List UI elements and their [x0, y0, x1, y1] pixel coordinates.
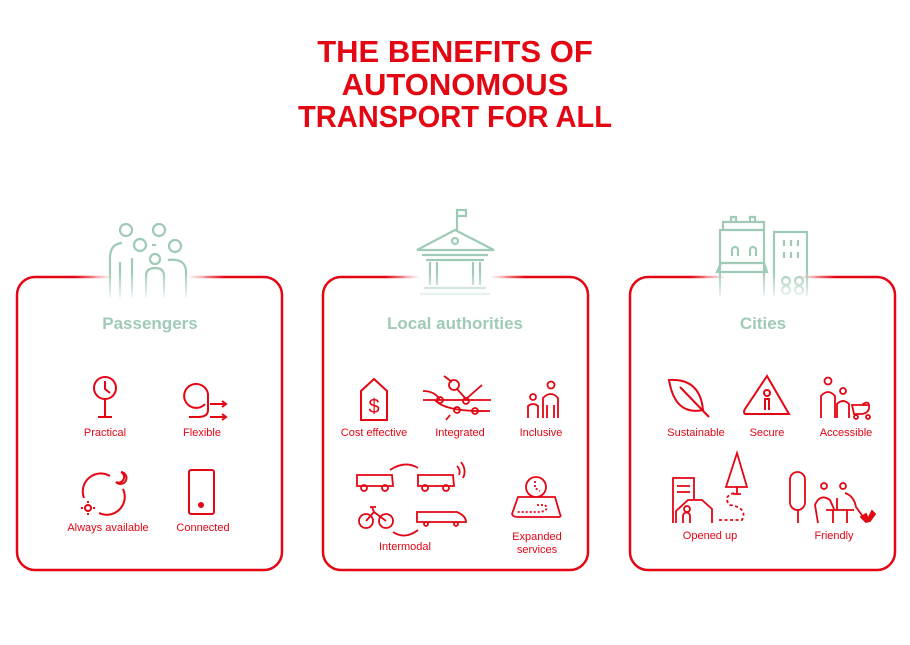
icon: intermodal: [357, 462, 466, 536]
icon: inclusive: [528, 382, 558, 418]
title: THE BENEFITS OF: [317, 34, 593, 69]
panel: local authorities: Inclusive: [520, 427, 562, 439]
panel: passengers: Always available: [67, 522, 149, 534]
panel: cities: Cities: [740, 314, 786, 333]
panel: passengers: Flexible: [183, 427, 221, 439]
icon: sustainable: [669, 380, 709, 417]
panel: local authorities: [323, 210, 588, 570]
icon: expanded services: [512, 477, 561, 517]
icon: flexible: [184, 384, 226, 420]
panel: local authorities: Local authorities: [387, 314, 523, 333]
icon: always available: [81, 472, 126, 515]
icon: accessible: [821, 378, 870, 419]
icon: buildings: [717, 217, 807, 296]
icon: family: [110, 224, 186, 298]
panel: passengers: [17, 224, 282, 570]
panel: local authorities: services: [517, 544, 558, 556]
panel: cities: Accessible: [820, 427, 872, 439]
panel: passengers: Connected: [176, 522, 230, 534]
icon: cost effective: $: [368, 396, 380, 418]
panel: local authorities: Cost effective: [341, 427, 407, 439]
panel: local authorities: Expanded: [512, 531, 562, 543]
title: TRANSPORT FOR ALL: [298, 99, 612, 134]
icon: secure: [744, 376, 789, 414]
icon: town hall: [417, 210, 494, 294]
icon: practical: [94, 377, 116, 417]
panel: local authorities: Intermodal: [379, 541, 431, 553]
icon: cost effective: [361, 379, 387, 420]
title: [298, 34, 612, 134]
title: AUTONOMOUS: [342, 67, 568, 102]
panel: local authorities: Integrated: [435, 427, 485, 439]
icon: connected: [189, 470, 214, 514]
panel: cities: Opened up: [683, 530, 737, 542]
panel: cities: Secure: [750, 427, 784, 439]
panel: cities: Friendly: [814, 530, 854, 542]
icon: integrated: [423, 376, 491, 420]
panel: cities: Sustainable: [667, 427, 725, 439]
label: Practical: [84, 427, 126, 439]
panel: cities: [630, 217, 895, 570]
icon: opened up: [673, 453, 747, 523]
icon: friendly: [790, 472, 875, 523]
heading: Passengers: [102, 314, 198, 333]
